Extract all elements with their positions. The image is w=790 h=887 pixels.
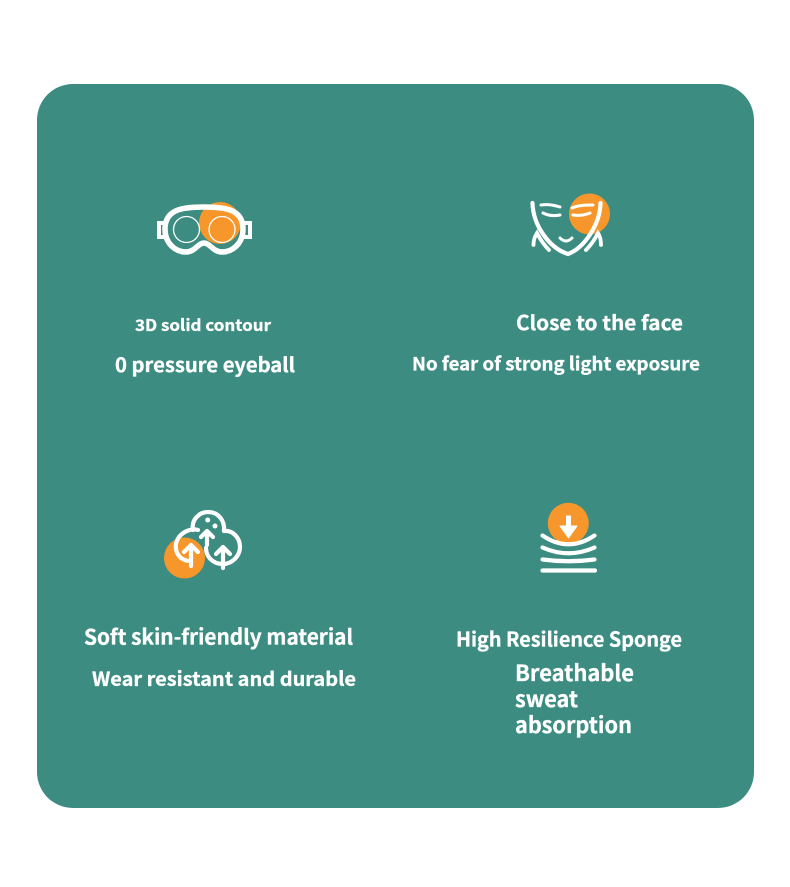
feature: close to the face — [412, 194, 700, 376]
icon: goggles — [159, 202, 250, 252]
label: 3D solid contour: 3D solid contour — [135, 312, 271, 336]
label: Close to the face: Close to the face — [516, 307, 683, 336]
label: Wear resistant and durable: Wear resistant and durable — [92, 663, 356, 692]
feature: sponge — [456, 503, 682, 740]
label: Breathable sweat absorption: Breathable — [515, 656, 634, 688]
label: Soft skin-friendly material: Soft skin-friendly material — [84, 622, 353, 652]
icon: face — [532, 194, 610, 254]
panel: green background — [37, 84, 754, 808]
label: High Resilience Sponge: High Resilience Sponge — [456, 624, 682, 652]
label: Breathable sweat absorption: sweat — [515, 682, 578, 714]
label: No fear of strong light exposure: No fear of strong light exposure — [412, 350, 700, 376]
feature: soft material — [84, 512, 356, 692]
label: Breathable sweat absorption: absorption — [515, 708, 632, 740]
icon: trees with arrows — [164, 512, 240, 578]
icon: sponge layers with arrow — [542, 503, 595, 570]
feature: 3D contour — [115, 202, 295, 378]
label: 0 pressure eyeball: 0 pressure eyeball — [115, 349, 295, 378]
label: Breathable sweat absorption — [515, 656, 634, 740]
